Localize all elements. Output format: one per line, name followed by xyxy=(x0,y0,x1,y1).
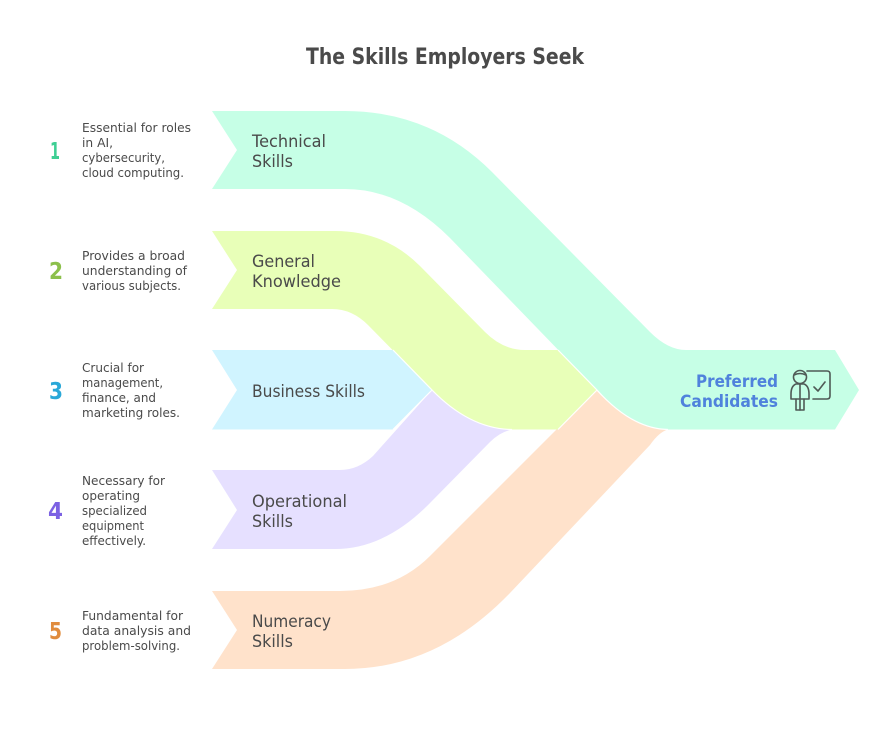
step 4: number and description: effectively. xyxy=(82,534,146,548)
step 1: number and description xyxy=(50,121,191,180)
outcome label: preferred candidates: Preferred xyxy=(696,372,778,391)
outcome label: preferred candidates: Candidates xyxy=(680,392,778,411)
step 3: number and description: 3 xyxy=(49,379,63,405)
step 5: number and description: problem-solving. xyxy=(82,639,180,653)
step 3: number and description: marketing roles. xyxy=(82,406,180,420)
outcome label: preferred candidates xyxy=(680,372,778,411)
ribbon: numeracy skills xyxy=(212,390,668,669)
icon: person presenting at a checklist board xyxy=(791,370,830,410)
step 2: number and description: understanding of xyxy=(82,264,188,278)
step 5: number and description: data analysis and xyxy=(82,624,191,638)
step 1: number and description: cloud computing. xyxy=(82,166,184,180)
step 1: number and description: in AI, xyxy=(82,136,113,150)
ribbon label: numeracy skills xyxy=(252,612,331,651)
step 1: number and description: 1 xyxy=(50,139,60,165)
step 4: number and description: 4 xyxy=(48,499,63,525)
ribbon label: operational skills: Skills xyxy=(252,512,293,531)
ribbon label: technical skills xyxy=(251,132,326,171)
ribbon label: technical skills: Skills xyxy=(252,152,293,171)
ribbon: general knowledge xyxy=(212,231,597,430)
step 5: number and description: 5 xyxy=(49,619,62,645)
step 5: number and description: Fundamental for xyxy=(82,609,183,623)
ribbon: operational skills xyxy=(212,390,512,549)
step 1: number and description: cybersecurity, xyxy=(82,151,165,165)
step 2: number and description xyxy=(49,249,188,293)
ribbon label: general knowledge: General xyxy=(252,252,315,271)
step 1: number and description: Essential for roles xyxy=(82,121,191,135)
title: The Skills Employers Seek xyxy=(306,45,585,70)
ribbon label: numeracy skills: Numeracy xyxy=(252,612,331,631)
step 4: number and description: specialized xyxy=(82,504,147,518)
ribbon: technical skills with preferred candidates arrowhead xyxy=(212,111,859,430)
step 3: number and description: management, xyxy=(82,376,163,390)
ribbon label: technical skills: Technical xyxy=(251,132,326,151)
ribbon label: general knowledge: Knowledge xyxy=(252,272,341,291)
step 3: number and description: finance, and xyxy=(82,391,156,405)
step 3: number and description xyxy=(49,361,180,420)
step 4: number and description: equipment xyxy=(82,519,144,533)
ribbon label: operational skills: Operational xyxy=(252,492,347,511)
step 2: number and description: 2 xyxy=(49,259,63,285)
step 4: number and description: operating xyxy=(82,489,140,503)
ribbon label: business skills: Business Skills xyxy=(252,382,365,401)
step 5: number and description xyxy=(49,609,191,653)
ribbon label: operational skills xyxy=(252,492,347,531)
ribbon label: general knowledge xyxy=(252,252,341,291)
ribbon: business skills xyxy=(212,350,432,430)
step 2: number and description: Provides a broad xyxy=(82,249,185,263)
step 3: number and description: Crucial for xyxy=(82,361,144,375)
flow ribbons xyxy=(212,111,859,669)
step 4: number and description: Necessary for xyxy=(82,474,165,488)
ribbon label: numeracy skills: Skills xyxy=(252,632,293,651)
step 4: number and description xyxy=(48,474,165,548)
step 2: number and description: various subjects. xyxy=(82,279,181,293)
